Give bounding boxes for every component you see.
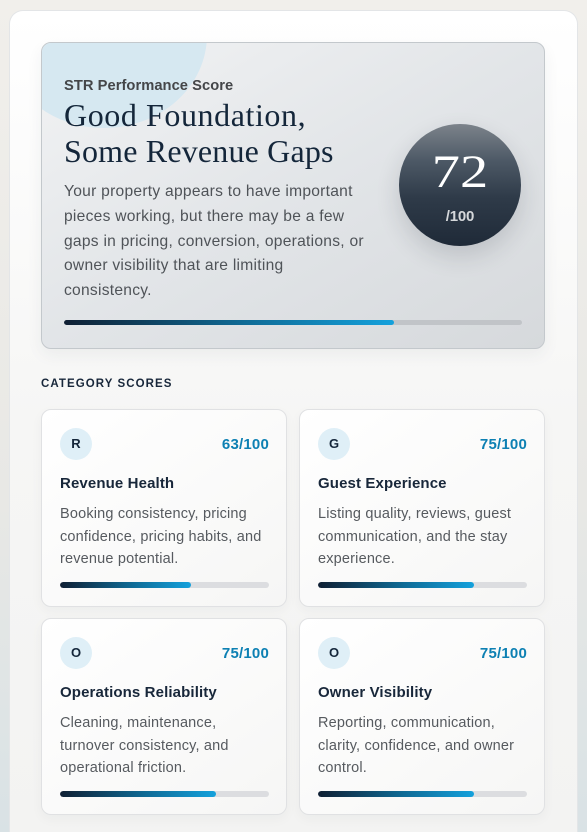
decorative circle <box>1 0 207 128</box>
description <box>318 715 514 776</box>
description <box>318 506 511 567</box>
description: Booking consistency, pricing <box>60 506 247 522</box>
panel: operations reliability <box>41 618 287 815</box>
badge: O <box>329 645 339 660</box>
section heading: CATEGORY SCORES <box>41 378 172 390</box>
name: Revenue Health <box>60 475 174 492</box>
badge <box>60 637 92 669</box>
description: turnover consistency, and <box>60 738 229 754</box>
score: 75/100 <box>222 645 269 662</box>
panel: revenue health <box>41 409 287 607</box>
panel: guest experience <box>299 409 545 607</box>
progress bar <box>60 791 269 797</box>
hero description: consistency. <box>64 282 152 299</box>
badge <box>318 428 350 460</box>
score: 63/100 <box>222 436 269 453</box>
badge <box>318 637 350 669</box>
progress bar <box>318 791 527 797</box>
score: 75/100 <box>480 645 527 662</box>
hero heading: Some Revenue Gaps <box>64 133 334 169</box>
hero heading: Good Foundation, <box>64 97 306 133</box>
hero description: gaps in pricing, conversion, operations, or <box>64 233 364 250</box>
score denominator: /100 <box>446 208 474 225</box>
description: Cleaning, maintenance, <box>60 715 216 731</box>
name: Owner Visibility <box>318 684 432 701</box>
badge: G <box>329 436 339 451</box>
hero description: owner visibility that are limiting <box>64 257 283 274</box>
overall progress bar <box>64 320 522 325</box>
name: Operations Reliability <box>60 684 217 701</box>
description: experience. <box>318 551 395 567</box>
progress bar <box>60 582 269 588</box>
score: 75/100 <box>480 436 527 453</box>
description: confidence, pricing habits, and <box>60 529 261 545</box>
panel: hero score <box>41 42 545 349</box>
hero description: Your property appears to have important <box>64 183 353 200</box>
description: communication, and the stay <box>318 529 507 545</box>
description <box>60 715 229 776</box>
description: operational friction. <box>60 760 186 776</box>
hero description <box>64 183 364 299</box>
description <box>60 506 261 567</box>
badge <box>60 428 92 460</box>
hero label: STR Performance Score <box>64 78 233 94</box>
description: Listing quality, reviews, guest <box>318 506 511 522</box>
hero heading <box>64 97 334 169</box>
name: Guest Experience <box>318 475 447 492</box>
description: Reporting, communication, <box>318 715 495 731</box>
description: revenue potential. <box>60 551 179 567</box>
badge: O <box>71 645 81 660</box>
panel: owner visibility <box>299 618 545 815</box>
description: control. <box>318 760 367 776</box>
score dial <box>399 124 521 246</box>
progress bar <box>318 582 527 588</box>
description: clarity, confidence, and owner <box>318 738 514 754</box>
badge: R <box>71 436 81 451</box>
hero description: pieces working, but there may be a few <box>64 208 344 225</box>
score number: 72 <box>432 146 488 198</box>
